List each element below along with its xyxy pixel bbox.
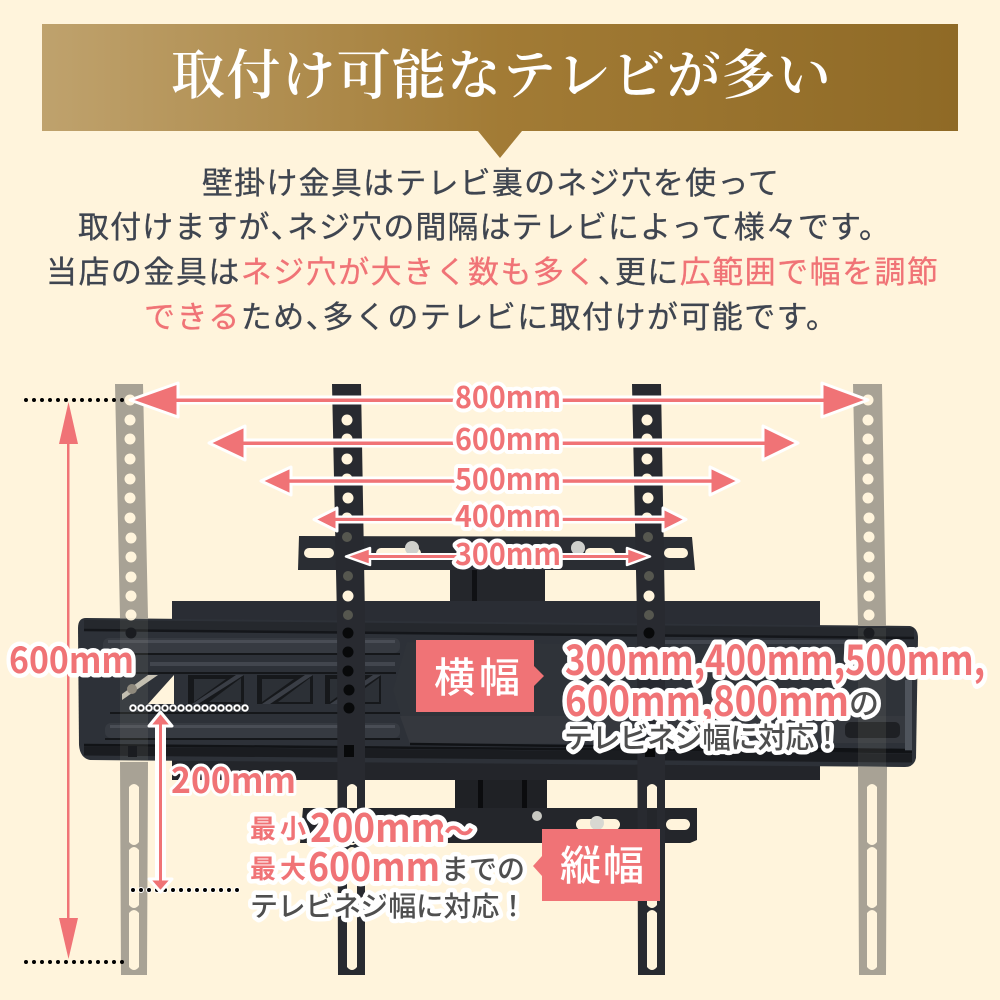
callout text: horizontal widths: 600mm,800mm [565,668,849,728]
wall mount bracket [78,536,918,843]
callout: vertical width [533,829,660,901]
title banner [42,24,958,158]
callout text: horizontal widths [564,627,985,757]
rear plate [172,601,820,780]
intro text: できるため、多くのテレビに取付けが可能です。 [144,292,837,337]
callout text: vertical widths: ～ [444,807,474,851]
intro text: 壁掛け金具はテレビ裏のネジ穴を使って [202,158,779,203]
label: vertical 200mm: 200mm [171,753,296,804]
lower ribs [84,712,912,758]
callout text: vertical widths: 200mm [310,798,446,854]
callout text: vertical widths: 600mm [308,837,440,893]
label: 300mm: 300mm [455,530,561,574]
title: 取付け可能なテレビが多い [171,33,831,110]
label: 600mm: 600mm [455,415,561,459]
arrow: 500mm [261,467,739,495]
callout text: vertical widths [250,798,527,925]
callout text: horizontal widths: テレビネジ幅に対応！ [564,715,842,757]
callout: horizontal width [416,640,544,712]
callout text: horizontal widths: の [849,679,879,723]
intro text: 当店の金具はネジ穴が大きく数も多く、更に広範囲で幅を調節 [46,247,938,292]
arrow: vertical 200mm [149,712,172,892]
label: 400mm: 400mm [455,492,561,536]
arrow: 400mm [314,508,686,531]
arrow: 300mm [346,548,650,565]
upper ribs [100,638,400,674]
callout text: vertical widths: までの [441,848,525,888]
brace pattern [188,675,381,704]
main arm [78,618,918,767]
arrow: vertical 600mm [59,402,78,959]
black strap center right [632,384,665,975]
gray strap left [115,384,148,975]
callout text: vertical widths: 最小 [250,809,306,846]
lower horizontal bar [300,808,697,843]
arrow: 600mm [209,426,798,460]
arrow: 800mm [130,383,868,417]
label: vertical 600mm: 600mm [9,632,134,684]
arm cut-outs [122,675,862,704]
upper horizontal bar [298,536,695,570]
intro text [46,158,938,337]
gray strap right [853,384,887,975]
callout: vertical width: 縦幅 [560,832,644,892]
callout: horizontal width: 横幅 [434,644,520,704]
callout text: vertical widths: テレビネジ幅に対応！ [250,885,527,925]
intro text: 取付けますが、ネジ穴の間隔はテレビによって様々です。 [78,202,890,247]
label: 800mm: 800mm [455,373,561,417]
pivot columns [450,570,547,815]
guide dots [26,400,247,962]
callout text: vertical widths: 最大 [250,849,306,886]
label: 500mm: 500mm [455,455,561,499]
black strap center left [332,384,365,975]
center cover [393,642,905,744]
